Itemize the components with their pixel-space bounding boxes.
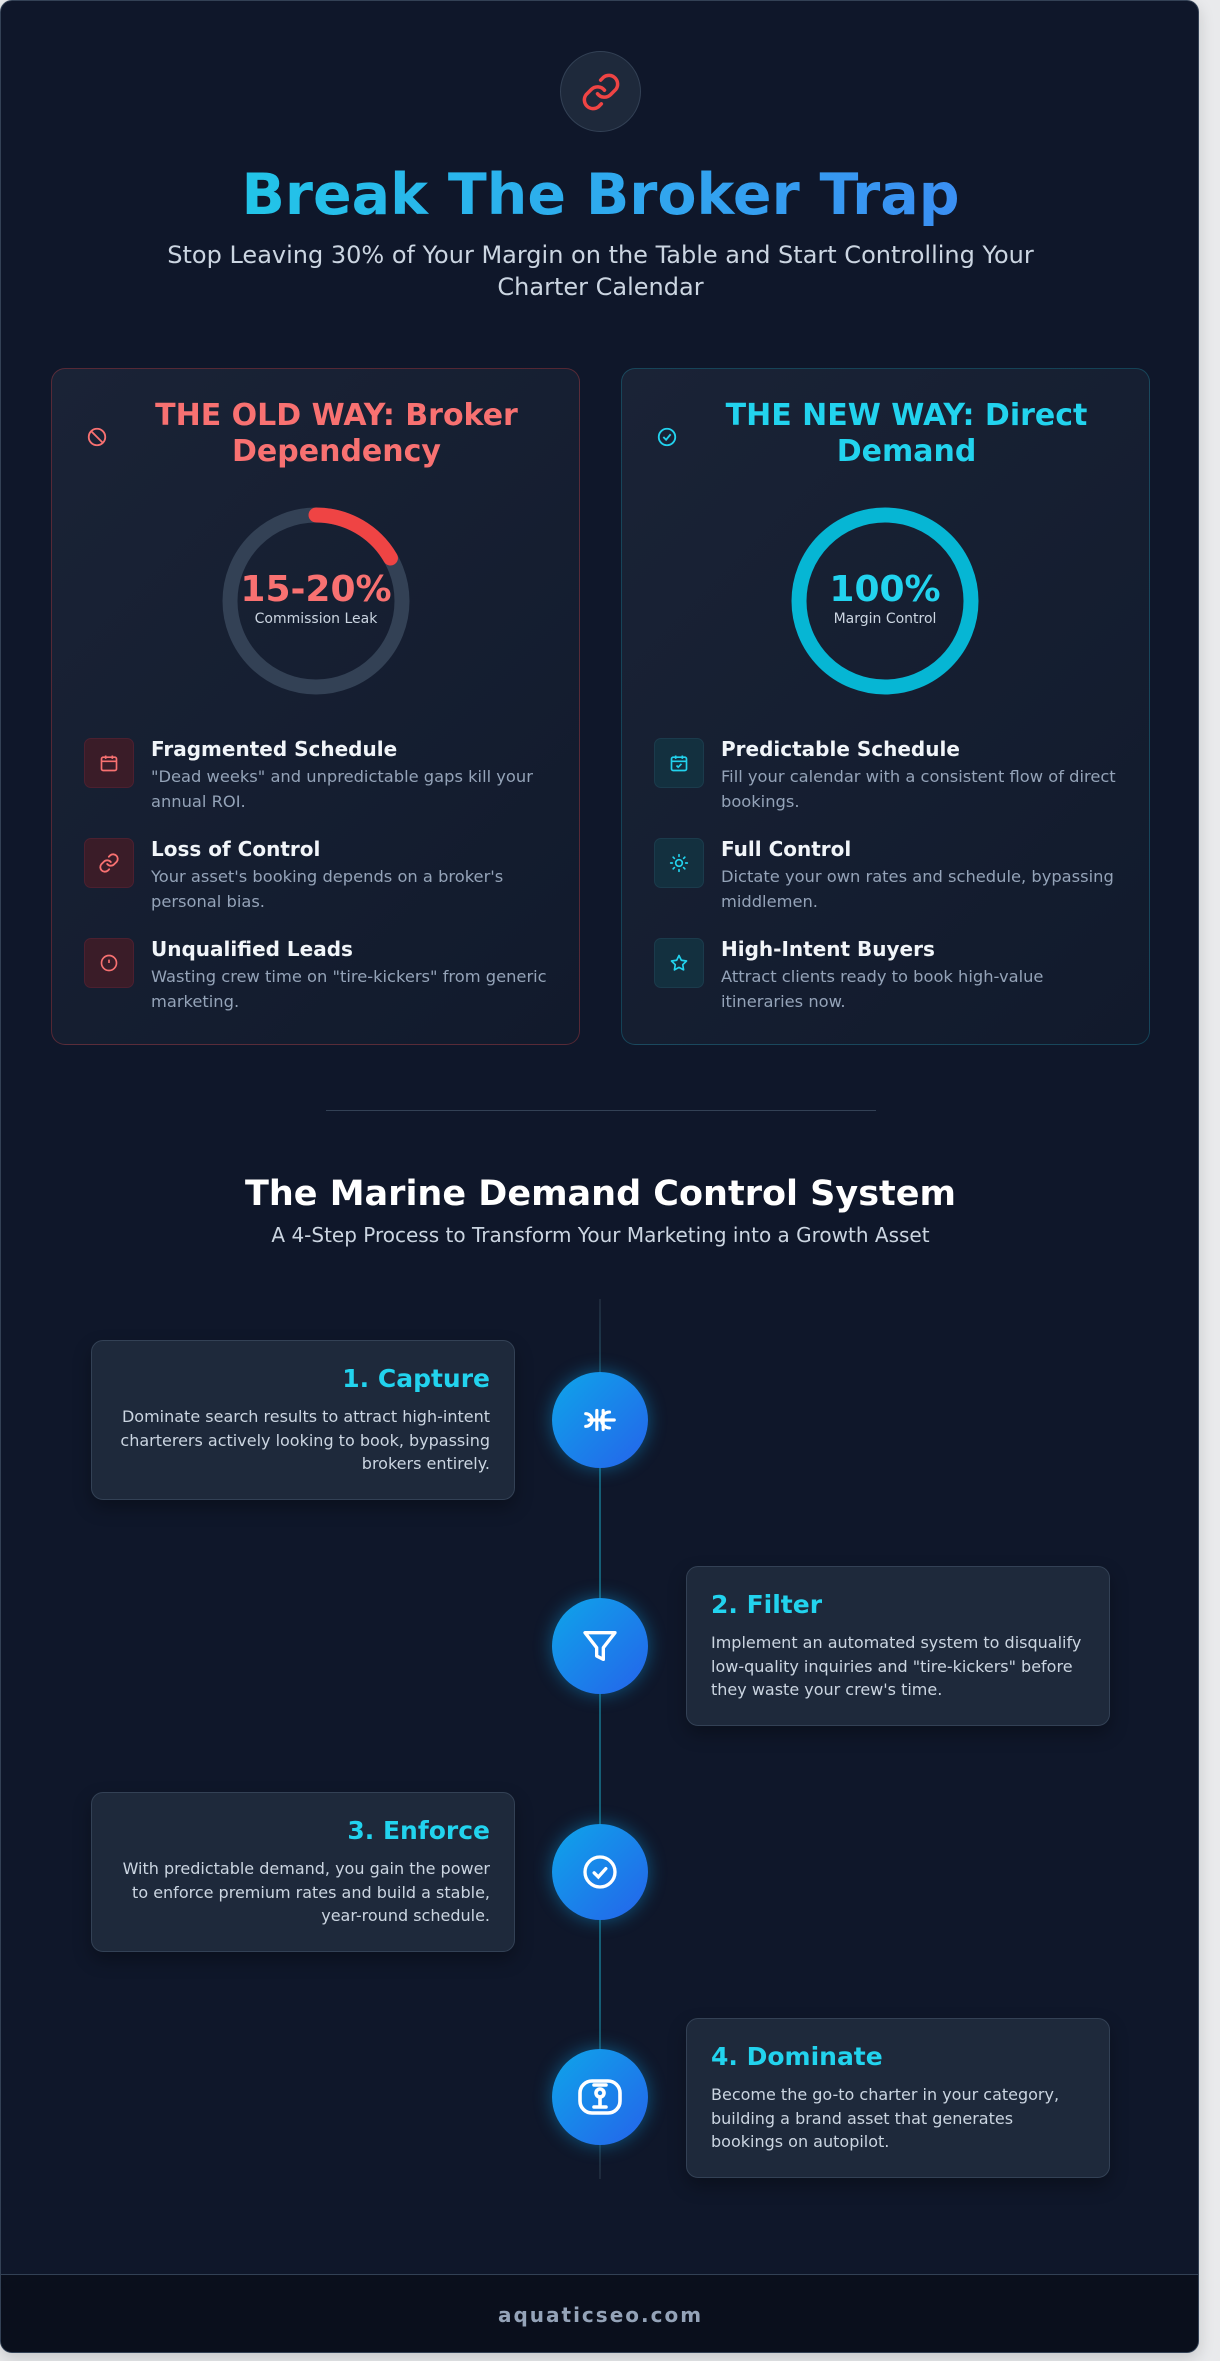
icon: check circle: [658, 428, 676, 446]
footer: [1, 2274, 1200, 2354]
step 3 card: [91, 1792, 515, 1952]
item: high-intent buyers: [654, 937, 1043, 1011]
step 1 card: Dominate search results to attract high-intent charterers actively looking to book, bypassing brokers entirely.: [120, 1407, 490, 1473]
step 2 card: [686, 1566, 1110, 1726]
item: fragmented schedule: [84, 737, 533, 811]
item: full control: [654, 837, 1114, 911]
panel: new way: [621, 368, 1150, 1045]
step 4 icon: [552, 2049, 648, 2145]
item: full control: Full Control: [721, 837, 851, 861]
step 2 card: 2. Filter: [711, 1590, 822, 1619]
chart: margin donut: Margin Control: [834, 611, 936, 627]
section heading: The Marine Demand Control System: [245, 1174, 956, 1214]
panel: old way: [51, 368, 580, 1045]
item: loss of control: Loss of Control: [151, 837, 320, 861]
icon: broken link: [560, 51, 641, 132]
item: loss of control: Your asset's booking depends on a broker's personal bias.: [151, 867, 503, 911]
item: predictable schedule: Predictable Schedule: [721, 737, 960, 761]
step 1 card: 1. Capture: [342, 1364, 490, 1393]
step 3 card: With predictable demand, you gain the power to enforce premium rates and build a stable, year-round schedule.: [123, 1859, 490, 1925]
timeline line: [599, 1299, 601, 2179]
item: unqualified leads: Wasting crew time on "tire-kickers" from generic marketing.: [151, 967, 547, 1011]
item: full control: Dictate your own rates and schedule, bypassing middlemen.: [721, 867, 1114, 911]
step 3 icon: [552, 1824, 648, 1920]
item: fragmented schedule: "Dead weeks" and unpredictable gaps kill your annual ROI.: [151, 767, 533, 811]
step 4 card: 4. Dominate: [711, 2042, 883, 2071]
step 2 card: Implement an automated system to disqualify low-quality inquiries and "tire-kickers" before they waste your crew's time.: [711, 1633, 1081, 1699]
icon: ban: [88, 428, 106, 446]
item: predictable schedule: [654, 737, 1116, 811]
heading: old way: THE OLD WAY: Broker Dependency: [155, 398, 518, 469]
section subtitle: A 4-Step Process to Transform Your Marketing into a Growth Asset: [271, 1223, 930, 1247]
subtitle: Stop Leaving 30% of Your Margin on the Table and Start Controlling Your Charter Calendar: [167, 241, 1034, 301]
chart: commission donut: 15-20%: [240, 569, 392, 610]
item: predictable schedule: Fill your calendar with a consistent flow of direct bookings.: [721, 767, 1116, 811]
step 3 card: 3. Enforce: [347, 1816, 490, 1845]
step 1 card: [91, 1340, 515, 1500]
heading: new way: THE NEW WAY: Direct Demand: [726, 398, 1087, 469]
step 4 card: [686, 2018, 1110, 2178]
item: high-intent buyers: High-Intent Buyers: [721, 937, 935, 961]
item: high-intent buyers: Attract clients ready to book high-value itineraries now.: [721, 967, 1043, 1011]
footer: aquaticseo.com: [498, 2302, 703, 2326]
item: loss of control: [84, 837, 503, 911]
chart: commission donut: [222, 508, 410, 694]
step 2 icon: [552, 1598, 648, 1694]
step 1 icon: [552, 1372, 648, 1468]
chart: commission donut: Commission Leak: [255, 611, 377, 627]
chart: margin donut: [792, 508, 978, 694]
step 4 card: Become the go-to charter in your category, building a brand asset that generates bookings on autopilot.: [711, 2085, 1059, 2151]
title: Break The Broker Trap: [241, 162, 960, 228]
item: unqualified leads: Unqualified Leads: [151, 937, 353, 961]
chart: margin donut: 100%: [829, 569, 941, 610]
item: unqualified leads: [84, 937, 547, 1011]
item: fragmented schedule: Fragmented Schedule: [151, 737, 397, 761]
